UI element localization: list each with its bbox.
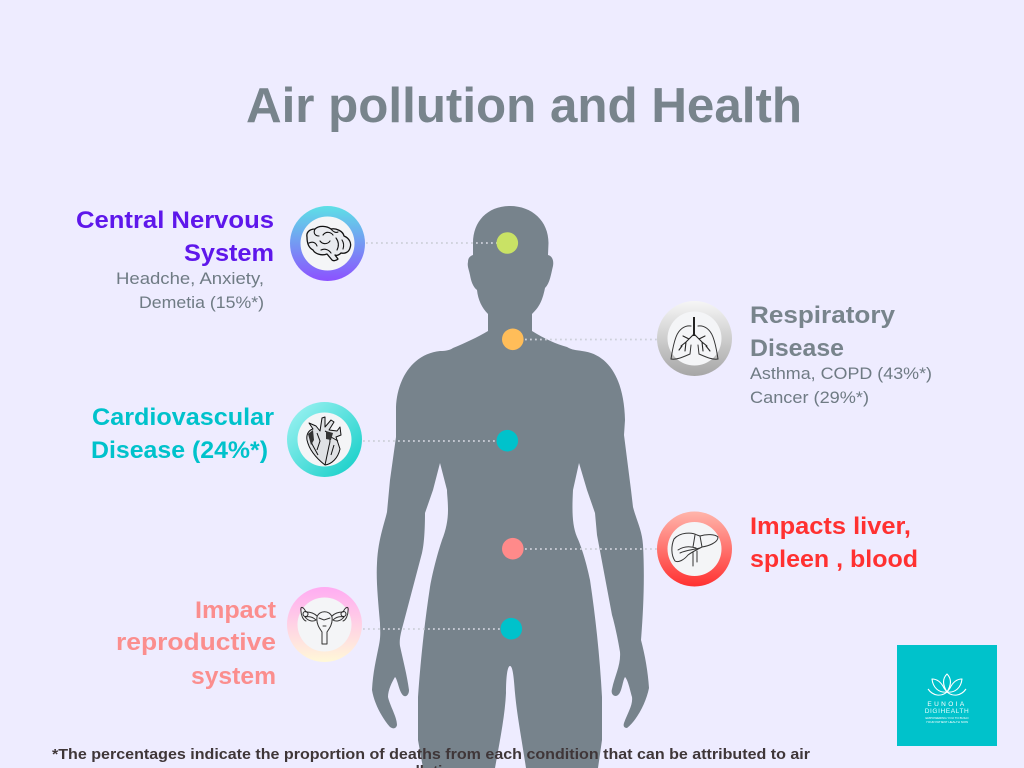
marker dot: abdomen [502,538,524,560]
heading: reproductive system: system [191,663,276,690]
icon: reproductive system [287,587,362,662]
logo: Eunoia Digihealth: EMPOWERING YOU TO BUILD [925,716,969,720]
heading: liver, spleen, blood: spleen , blood [750,546,918,573]
text: respiratory conditions: Asthma, COPD (43%*) [750,365,932,383]
heading: respiratory disease [750,302,896,362]
heading: cardiovascular disease [91,404,274,464]
heading: liver, spleen, blood: Impacts liver, [750,513,911,540]
heading: reproductive system: Impact [195,597,276,624]
heading: respiratory disease: Respiratory [750,302,896,329]
text: central nervous system conditions [116,270,264,312]
heading: central nervous system: Central Nervous [76,207,274,234]
logo: Eunoia Digihealth: YOUR PATIENT HEALTH NOW [926,720,968,724]
dotted connector: reproductive [363,628,501,630]
text: respiratory conditions [750,365,932,407]
icon: liver [657,512,732,586]
marker dot: throat [502,328,524,350]
dotted connector: central nervous system [366,242,497,244]
text: respiratory conditions: Cancer (29%*) [750,389,869,407]
text: central nervous system conditions: Demetia (15%*) [139,294,264,312]
logo: Eunoia Digihealth [897,645,997,746]
heading: liver, spleen, blood [750,513,918,573]
heading: central nervous system: System [184,240,274,267]
marker dot: pelvis [500,618,522,640]
footnote: *The percentages indicate the proportion of deaths from each condition that can be attributed to air [52,746,810,763]
heading: cardiovascular disease: Disease (24%*) [91,437,268,464]
heading: central nervous system [76,207,274,267]
logo: Eunoia Digihealth: DIGIHEALTH [925,708,969,715]
marker dot: head [496,232,518,254]
heading: cardiovascular disease: Cardiovascular [92,404,274,431]
dotted connector: cardiovascular [363,440,497,442]
title: Air pollution and Health [246,79,802,133]
human body silhouette [372,206,649,768]
icon: lungs [657,301,732,376]
dotted connector: respiratory [525,338,657,340]
icon: brain [290,206,365,281]
heading: respiratory disease: Disease [750,335,844,362]
logo: Eunoia Digihealth: EUNOIA [927,701,967,708]
text: central nervous system conditions: Headche, Anxiety, [116,270,264,288]
heading: reproductive system: reproductive [116,629,276,656]
icon: heart [287,402,362,477]
marker dot: chest [496,430,518,452]
dotted connector: liver [525,548,657,550]
heading: reproductive system [116,597,276,690]
